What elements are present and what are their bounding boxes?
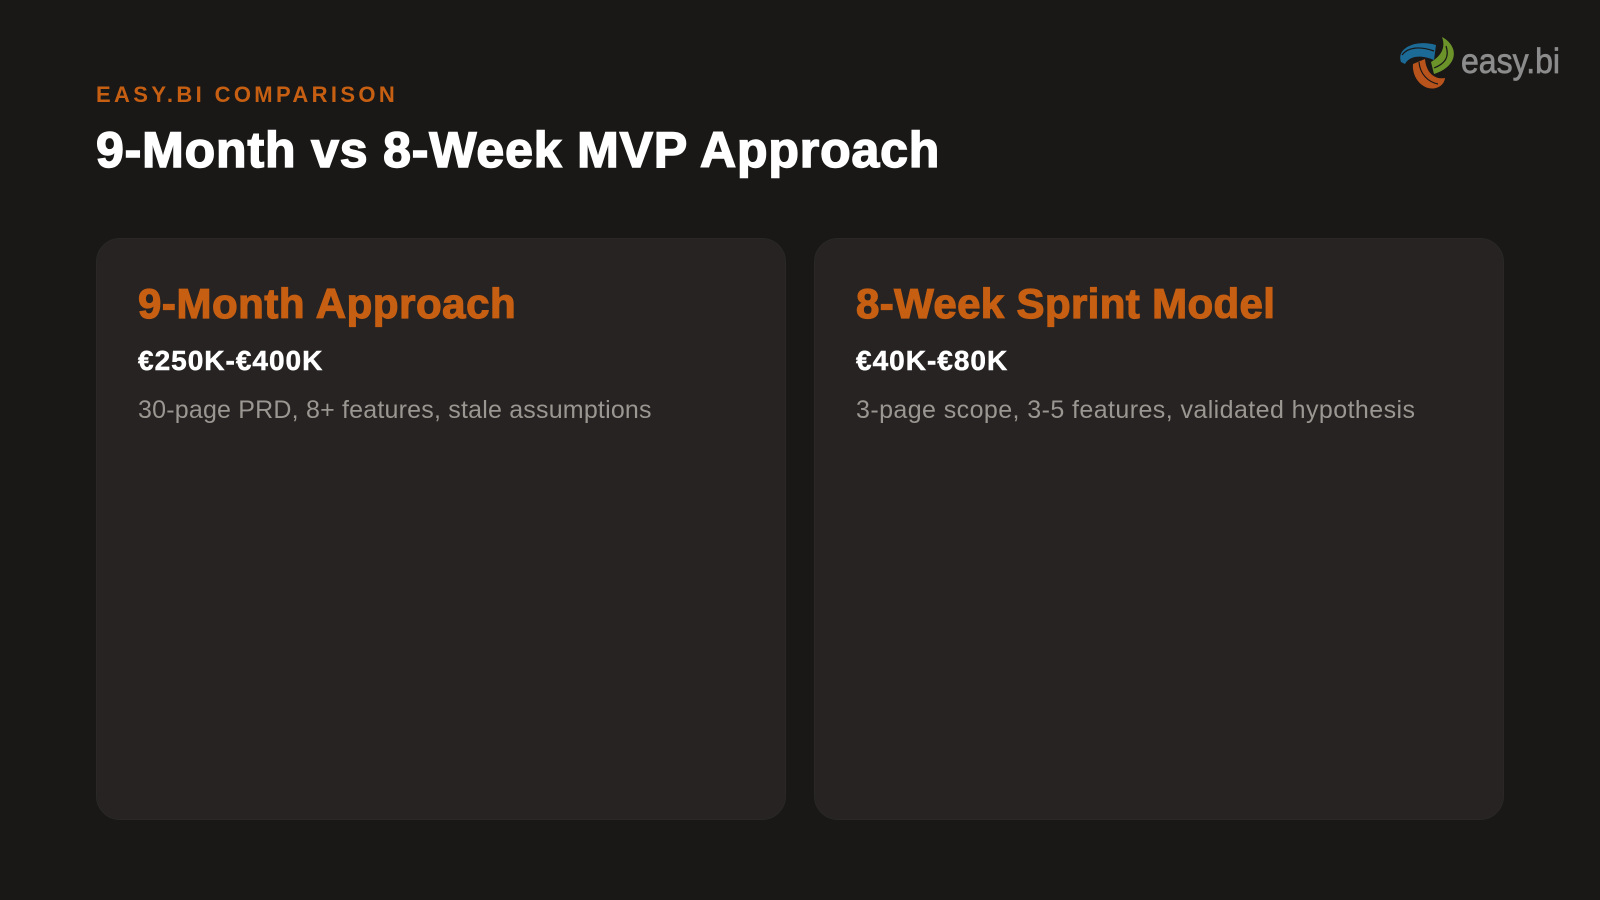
icon: logo swirl — [1400, 37, 1454, 89]
price range: €250K-€400K — [138, 345, 323, 376]
panel heading: 9-Month Approach — [138, 280, 516, 327]
panel heading: 8-Week Sprint Model — [856, 280, 1275, 327]
title: 9-Month vs 8-Week MVP Approach — [96, 122, 940, 178]
description: 30-page PRD, 8+ features, stale assumptions — [138, 396, 652, 424]
logo wordmark: easy.bi — [1461, 42, 1560, 81]
panel: 9-Month Approach — [96, 238, 786, 820]
logo: easy.bi — [1400, 37, 1560, 88]
price range: €40K-€80K — [856, 345, 1008, 376]
description: 3-page scope, 3-5 features, validated hypothesis — [856, 396, 1415, 424]
eyebrow label: EASY.BI COMPARISON — [96, 82, 398, 107]
panel: 8-Week Sprint Model — [814, 238, 1504, 820]
